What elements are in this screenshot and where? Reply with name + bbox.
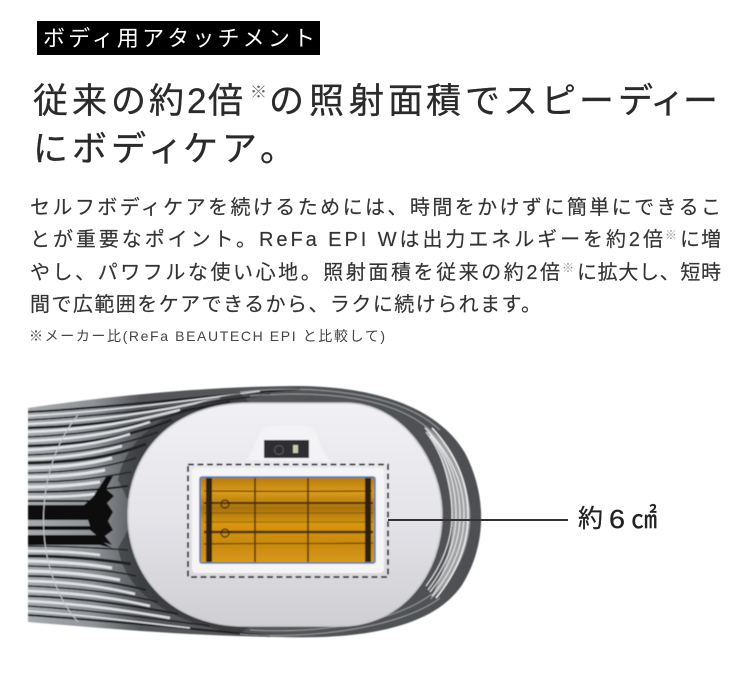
sensor — [264, 440, 309, 458]
body text: ※ — [665, 228, 677, 242]
seam arc on body — [44, 415, 78, 622]
body text: とが重要なポイント。ReFa EPI Wは出力エネルギーを約2倍 — [30, 228, 663, 251]
area label — [578, 504, 657, 534]
leader line — [388, 519, 568, 521]
dashed measurement outline — [188, 464, 388, 577]
amber lamp window — [200, 477, 375, 563]
title: ィ — [650, 82, 685, 121]
title: の — [111, 82, 146, 121]
body text: セルフボディケアを続けるためには、時間をかけずに簡単にできるこ — [30, 196, 721, 219]
title: ケ — [183, 130, 218, 169]
heading tag: ボディ用アタッチメント: ボディ用アタッチメント — [43, 26, 315, 51]
area label: ㎠ — [631, 504, 657, 534]
body text: に拡大し、短時 — [577, 261, 721, 284]
title: に — [33, 130, 68, 169]
body text: に増 — [680, 228, 721, 251]
title: デ — [618, 82, 653, 121]
title: ィ — [148, 130, 183, 169]
title: ※ — [250, 83, 267, 102]
dark sweep around the face edge — [118, 393, 250, 500]
title: 来 — [72, 82, 107, 121]
area label: 6 — [609, 504, 625, 534]
title: ー — [683, 82, 718, 121]
title: 2 — [187, 82, 206, 121]
title: ピ — [541, 82, 576, 121]
title: 。 — [260, 130, 295, 169]
treatment window frame — [192, 468, 384, 573]
white face plate — [128, 403, 442, 626]
sensor housing — [246, 426, 332, 462]
body text: やし、パワフルな使い心地。照射面積を従来の約2倍 — [30, 261, 560, 284]
title: 従 — [33, 82, 68, 121]
title: 積 — [426, 82, 461, 121]
concentric rim band — [423, 424, 470, 600]
title: の — [269, 82, 304, 121]
device body with ribbed stripes — [28, 380, 498, 645]
title — [33, 82, 718, 169]
body text — [30, 196, 721, 316]
title: ス — [503, 82, 538, 121]
dark reflection bands — [28, 476, 114, 548]
title: 照 — [309, 82, 344, 121]
title: ア — [222, 130, 257, 169]
title: ボ — [72, 130, 107, 169]
title: 射 — [349, 82, 384, 121]
body text: 間で広範囲をケアできるから、ラクに続けられます。 — [30, 293, 541, 316]
title: 約 — [149, 82, 184, 121]
body text: ※ — [562, 261, 574, 275]
top and bottom rim highlights — [240, 389, 440, 636]
device illustration — [28, 380, 498, 645]
title: 面 — [388, 82, 423, 121]
footnote: ※メーカー比(ReFa BEAUTECH EPI と比較して) — [29, 328, 385, 344]
area label: 約 — [578, 505, 603, 533]
title: 倍 — [208, 82, 243, 121]
title: デ — [111, 130, 146, 169]
title: ー — [579, 82, 614, 121]
title: で — [465, 82, 500, 121]
